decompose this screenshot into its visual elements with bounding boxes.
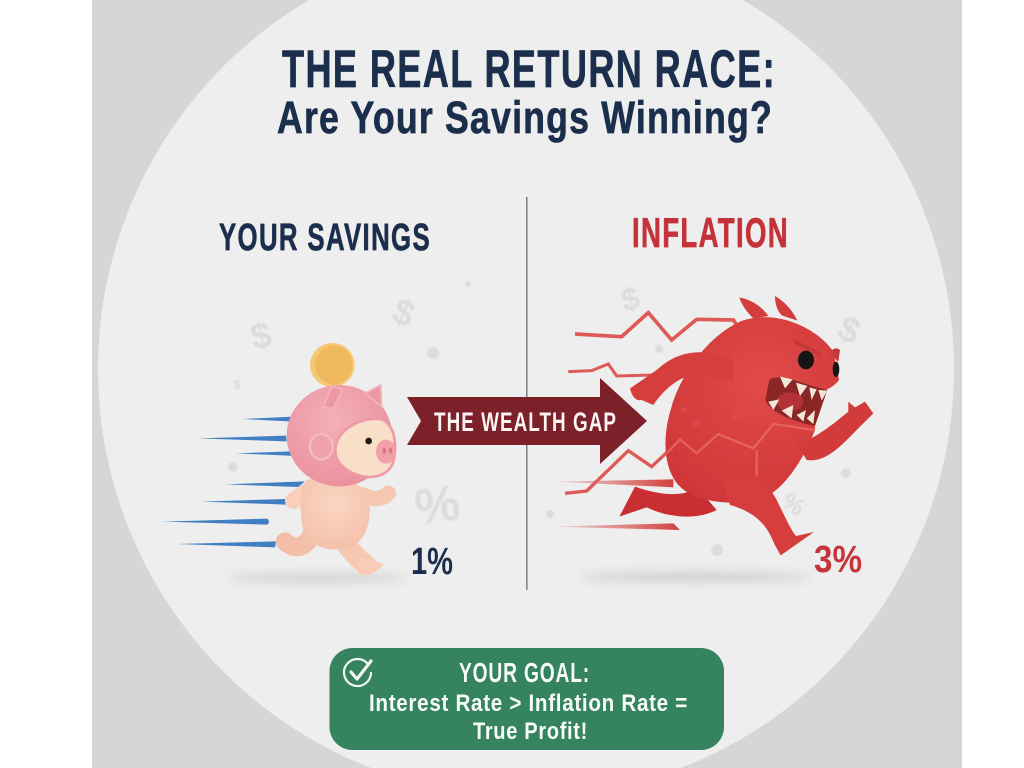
- value: savings rate: 1%: [411, 541, 453, 583]
- pig ear ring: [310, 434, 333, 459]
- faint background symbols: %: [411, 474, 463, 536]
- monster mouth: [765, 377, 827, 426]
- heading: your savings: YOUR SAVINGS: [219, 217, 431, 259]
- helmet ears: [323, 385, 382, 408]
- main title: [277, 40, 776, 143]
- main title: THE REAL RETURN RACE:: [282, 40, 776, 99]
- zigzag lines: [565, 313, 773, 493]
- faint background symbols: $: [387, 290, 421, 335]
- pig snout: [376, 440, 396, 464]
- faint background symbols: $: [831, 307, 867, 352]
- callout: your goal: [330, 648, 724, 750]
- faint background symbols: $: [233, 377, 241, 392]
- speed lines: [163, 417, 305, 547]
- teeth: [768, 377, 827, 424]
- main title: Are Your Savings Winning?: [277, 92, 773, 143]
- belly bumps: [681, 407, 741, 427]
- faint background symbols: [228, 279, 867, 556]
- monster body: [665, 317, 839, 503]
- faint background symbols: $: [247, 313, 275, 358]
- callout text: True Profit!: [473, 718, 588, 745]
- faint background symbols: %: [777, 487, 810, 522]
- icon: red inflation monster: [552, 296, 873, 555]
- pig foot: [357, 557, 384, 574]
- pig eye: [365, 438, 372, 444]
- left arm: [630, 352, 733, 405]
- back leg: [619, 487, 717, 517]
- pig helmet: [287, 385, 392, 486]
- right arm: [797, 402, 873, 460]
- callout text: YOUR GOAL:: [459, 657, 590, 688]
- heading: inflation: INFLATION: [632, 209, 789, 256]
- mouth inner: [777, 392, 803, 411]
- monster eyes: [798, 351, 839, 377]
- value: inflation rate: 3%: [814, 539, 862, 581]
- monster brows: [793, 338, 840, 362]
- arrow: the wealth gap: THE WEALTH GAP: [434, 407, 617, 437]
- callout text: Interest Rate > Inflation Rate =: [369, 690, 688, 717]
- horns: [739, 296, 797, 321]
- speed streaks: [552, 479, 680, 530]
- belly zigzag: [667, 424, 815, 477]
- coin: [310, 343, 355, 387]
- legs and arms: [285, 488, 388, 565]
- faint background symbols: $: [617, 279, 644, 319]
- callout text: [369, 657, 688, 745]
- front leg: [720, 474, 814, 555]
- icon: check mark: [344, 659, 371, 686]
- ground shadows: [228, 573, 810, 582]
- icon: running piggy bank: [163, 343, 396, 574]
- pig body: [300, 477, 370, 550]
- arrow: the wealth gap: [407, 378, 647, 464]
- pig face: [335, 419, 395, 477]
- centre divider: [526, 197, 528, 590]
